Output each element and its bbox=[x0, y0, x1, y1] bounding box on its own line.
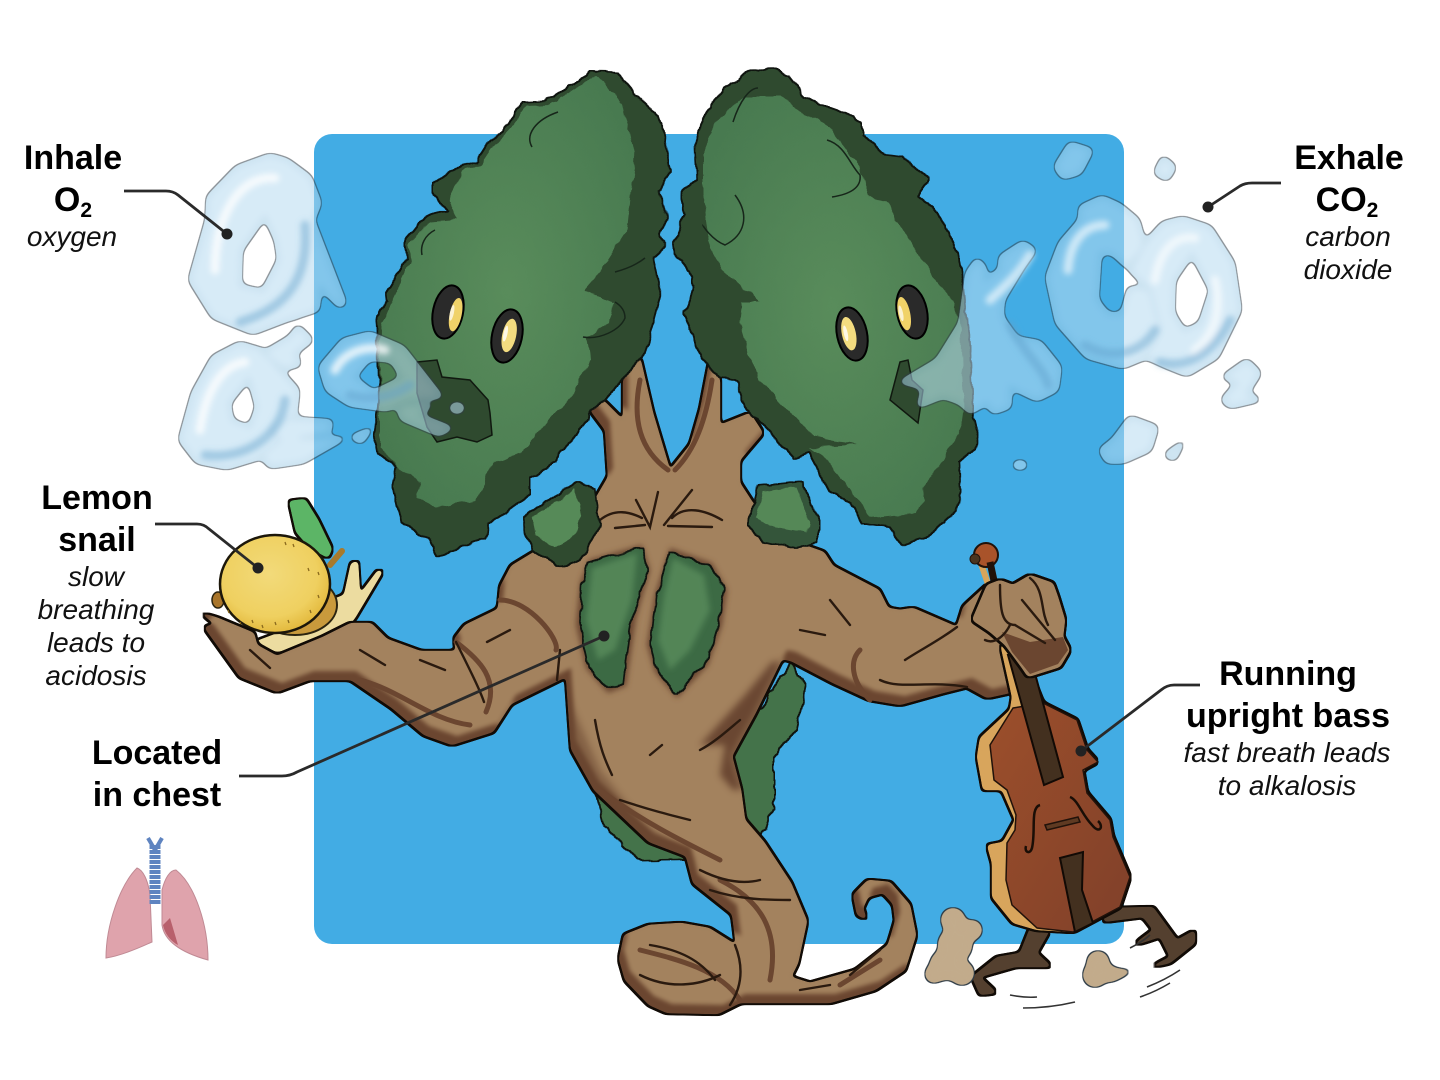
bubble highlights left bbox=[200, 178, 410, 456]
label: lemon snail bbox=[38, 479, 155, 691]
label: inhale O2: Inhale bbox=[24, 139, 122, 177]
bass legs bbox=[972, 907, 1195, 995]
label: located in chest: Located bbox=[92, 734, 222, 772]
cracks bbox=[422, 112, 645, 338]
green fringe behind body bbox=[596, 663, 805, 859]
label: inhale O2: 2 bbox=[80, 199, 92, 222]
exhaled breath and CO2 bubbles bbox=[900, 143, 1260, 470]
label: inhale O2: oxygen bbox=[27, 221, 117, 252]
label: exhale CO2: carbon bbox=[1305, 221, 1391, 252]
label: lemon snail: leads to bbox=[47, 627, 145, 658]
shell bbox=[253, 575, 337, 635]
eyes bbox=[428, 282, 932, 366]
small 2 bbox=[1222, 360, 1260, 407]
bass scroll bbox=[970, 543, 998, 590]
label: inhale O2 bbox=[24, 139, 122, 252]
eye right bbox=[832, 304, 872, 364]
letter O bbox=[1130, 218, 1240, 375]
right lung mouth bbox=[890, 360, 923, 423]
label: running upright bass: upright bass bbox=[1186, 697, 1390, 735]
big O bbox=[190, 155, 345, 333]
leaf bbox=[289, 499, 332, 558]
fist bbox=[972, 575, 1070, 677]
right lung bbox=[675, 68, 977, 545]
bark creases bbox=[250, 380, 1000, 1005]
shoulder moss right bbox=[748, 483, 817, 547]
eye far right bbox=[892, 282, 932, 342]
droplets bbox=[1055, 143, 1092, 178]
lemon nub bbox=[212, 592, 224, 608]
label: lemon snail: breathing bbox=[38, 594, 155, 625]
breath plume bbox=[900, 242, 1060, 413]
right lung face bbox=[703, 97, 963, 517]
label: lemon snail: slow bbox=[68, 561, 126, 592]
lemon specks bbox=[228, 542, 319, 628]
label: exhale CO2: 2 bbox=[1367, 199, 1378, 222]
lemon snail bbox=[212, 499, 383, 652]
label: running upright bass: fast breath leads bbox=[1183, 737, 1391, 768]
fingerboard bbox=[1008, 655, 1063, 785]
mouth wisps bbox=[398, 405, 452, 435]
label: located in chest: in chest bbox=[93, 776, 221, 814]
cracks bbox=[703, 88, 860, 245]
f-holes bbox=[1026, 797, 1101, 852]
second O bbox=[180, 343, 298, 468]
label: exhale CO2 bbox=[1294, 139, 1404, 285]
lower wisps bbox=[261, 418, 345, 467]
label: lemon snail: acidosis bbox=[45, 660, 147, 691]
left oxygen bubbles O2 bbox=[180, 155, 465, 468]
lemon bbox=[220, 535, 330, 633]
label: running upright bass: to alkalosis bbox=[1218, 770, 1356, 801]
label: running upright bass bbox=[1183, 655, 1391, 801]
right lung shadow bbox=[675, 68, 977, 545]
label: exhale CO2: dioxide bbox=[1304, 254, 1392, 285]
droplet bbox=[351, 428, 372, 443]
leader lines bbox=[124, 183, 1281, 776]
left lung bbox=[375, 72, 670, 555]
dust clouds bbox=[925, 908, 1136, 987]
bass face bbox=[990, 703, 1130, 932]
left lung mouth bbox=[417, 360, 492, 442]
label: running upright bass: Running bbox=[1219, 655, 1357, 693]
shoulder moss left bbox=[525, 485, 599, 566]
label: lemon snail: Lemon bbox=[41, 479, 153, 517]
lemon stem bbox=[330, 551, 342, 565]
small 2 bbox=[263, 326, 312, 369]
left lung face bbox=[380, 75, 635, 507]
running upright bass bbox=[970, 543, 1195, 1008]
tree trunk body with arms and tail bbox=[197, 348, 1075, 1014]
eye left bbox=[487, 306, 527, 366]
left lung shadow bbox=[375, 72, 670, 555]
body fill and shading bbox=[197, 348, 1075, 1014]
label: exhale CO2: CO bbox=[1316, 181, 1367, 219]
bass rim bbox=[977, 643, 1130, 932]
bridge bbox=[1045, 817, 1080, 830]
label: exhale CO2: Exhale bbox=[1294, 139, 1404, 177]
eye far left bbox=[428, 282, 468, 342]
letter C bbox=[1047, 197, 1167, 367]
chest lung patch right bbox=[647, 548, 727, 698]
motion lines bbox=[1010, 935, 1180, 1008]
blue O with tail bbox=[320, 333, 442, 410]
icon: small anatomical lungs bbox=[106, 838, 208, 960]
bubble highlights right bbox=[990, 225, 1230, 385]
snail body bbox=[254, 561, 383, 652]
label: inhale O2: O bbox=[54, 181, 80, 219]
label: located in chest bbox=[92, 734, 222, 814]
label: lemon snail: snail bbox=[58, 521, 136, 559]
blue background panel bbox=[314, 134, 1124, 944]
chest lung patch left bbox=[576, 545, 650, 693]
tailpiece bbox=[1060, 852, 1093, 932]
